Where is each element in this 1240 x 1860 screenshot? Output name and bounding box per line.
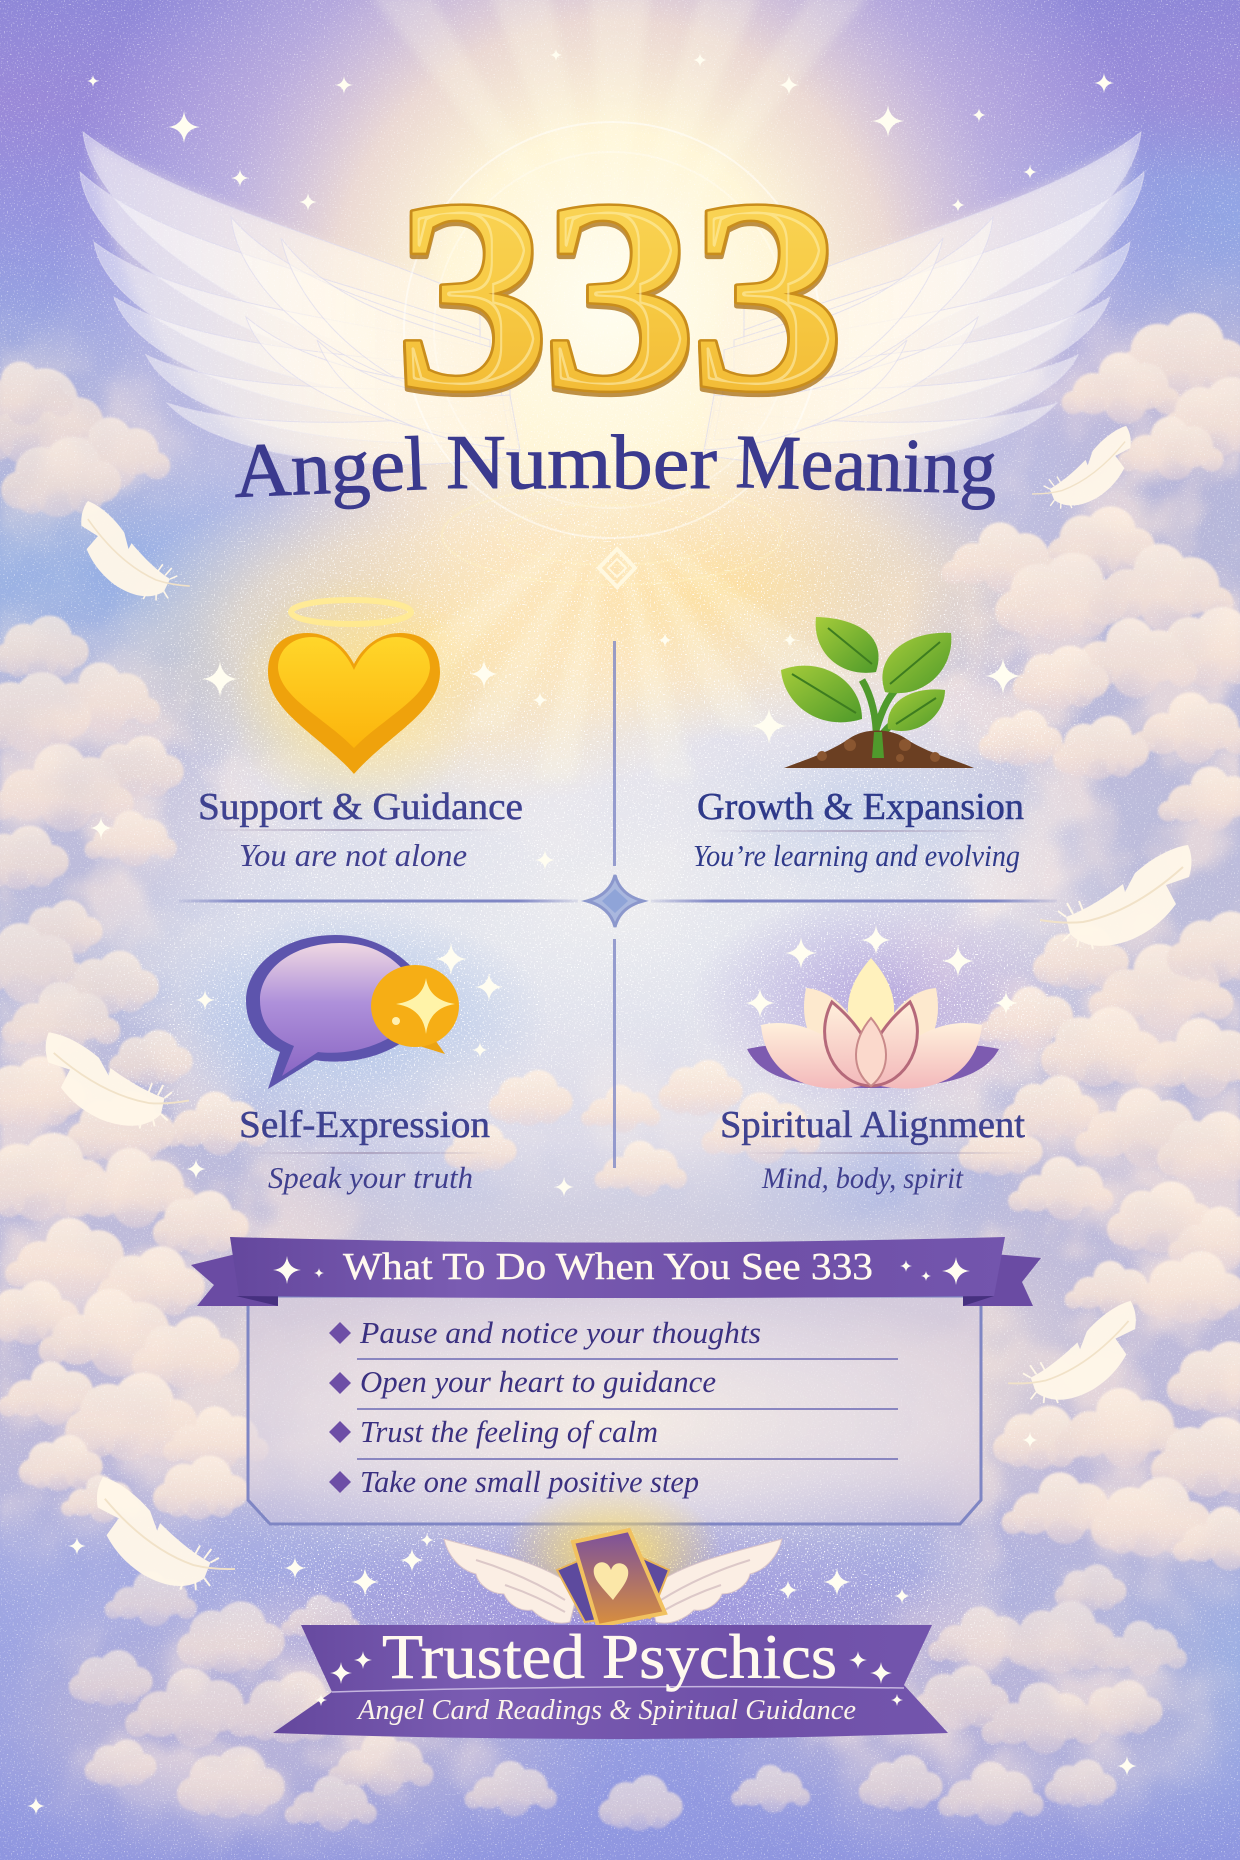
title: Angel Number Meaning: Number xyxy=(446,419,717,505)
panel: self-expression xyxy=(239,935,490,1195)
big gold 333 numerals: 3 xyxy=(394,143,551,448)
subheading: You are not alone xyxy=(239,837,467,873)
heading: Spiritual Alignment xyxy=(720,1104,1025,1146)
brand name: Trusted Psychics xyxy=(382,1621,837,1692)
ribbon banner xyxy=(191,1237,1041,1306)
panel: support and guidance xyxy=(198,575,523,873)
panel: growth and expansion xyxy=(693,617,1024,873)
subheading: Speak your truth xyxy=(268,1160,473,1195)
sun rays xyxy=(370,0,870,780)
brand banner xyxy=(273,1621,948,1739)
checklist items xyxy=(329,1315,898,1499)
title: Angel Number Meaning: Meaning xyxy=(735,418,998,510)
checklist items: Pause and notice your thoughts xyxy=(359,1315,761,1350)
title: Angel Number Meaning xyxy=(232,418,998,514)
cumulus clouds: sides lower xyxy=(0,313,1240,1570)
icon: lotus xyxy=(747,958,999,1089)
icon: golden heart with halo xyxy=(229,575,479,825)
subheading: You’re learning and evolving xyxy=(693,838,1020,873)
panel: spiritual alignment xyxy=(720,958,1025,1195)
checklist items: Trust the feeling of calm xyxy=(360,1414,658,1449)
quadrant dividers xyxy=(179,641,1057,1168)
wings behind the numerals xyxy=(80,132,1144,465)
icon: speech bubbles xyxy=(246,935,459,1089)
subheading: Mind, body, spirit xyxy=(761,1162,964,1195)
brand tagline: Angel Card Readings & Spiritual Guidance xyxy=(356,1694,856,1726)
checklist frame xyxy=(248,1296,981,1524)
halo rings xyxy=(404,122,820,585)
heading: Growth & Expansion xyxy=(697,786,1024,828)
title: Angel Number Meaning: Angel xyxy=(232,420,429,514)
big gold 333 numerals: 3 xyxy=(689,143,846,448)
panel: what to do checklist xyxy=(191,1237,1041,1524)
checklist items: Open your heart to guidance xyxy=(360,1364,716,1399)
banner heading: What To Do When You See 333 xyxy=(343,1246,873,1288)
big gold 333 numerals xyxy=(394,143,846,448)
ornament diamond xyxy=(599,549,635,587)
feathers xyxy=(45,425,1191,1597)
big gold 333 numerals: 3 xyxy=(541,143,698,448)
heading: Self-Expression xyxy=(239,1104,490,1146)
logo: winged angel cards xyxy=(444,1485,782,1626)
checklist items: Take one small positive step xyxy=(360,1464,699,1499)
icon: seedling xyxy=(781,617,974,768)
cumulus clouds: bottom xyxy=(69,1564,1187,1832)
heading: Support & Guidance xyxy=(198,786,523,828)
cumulus clouds: left upper xyxy=(0,361,193,1086)
